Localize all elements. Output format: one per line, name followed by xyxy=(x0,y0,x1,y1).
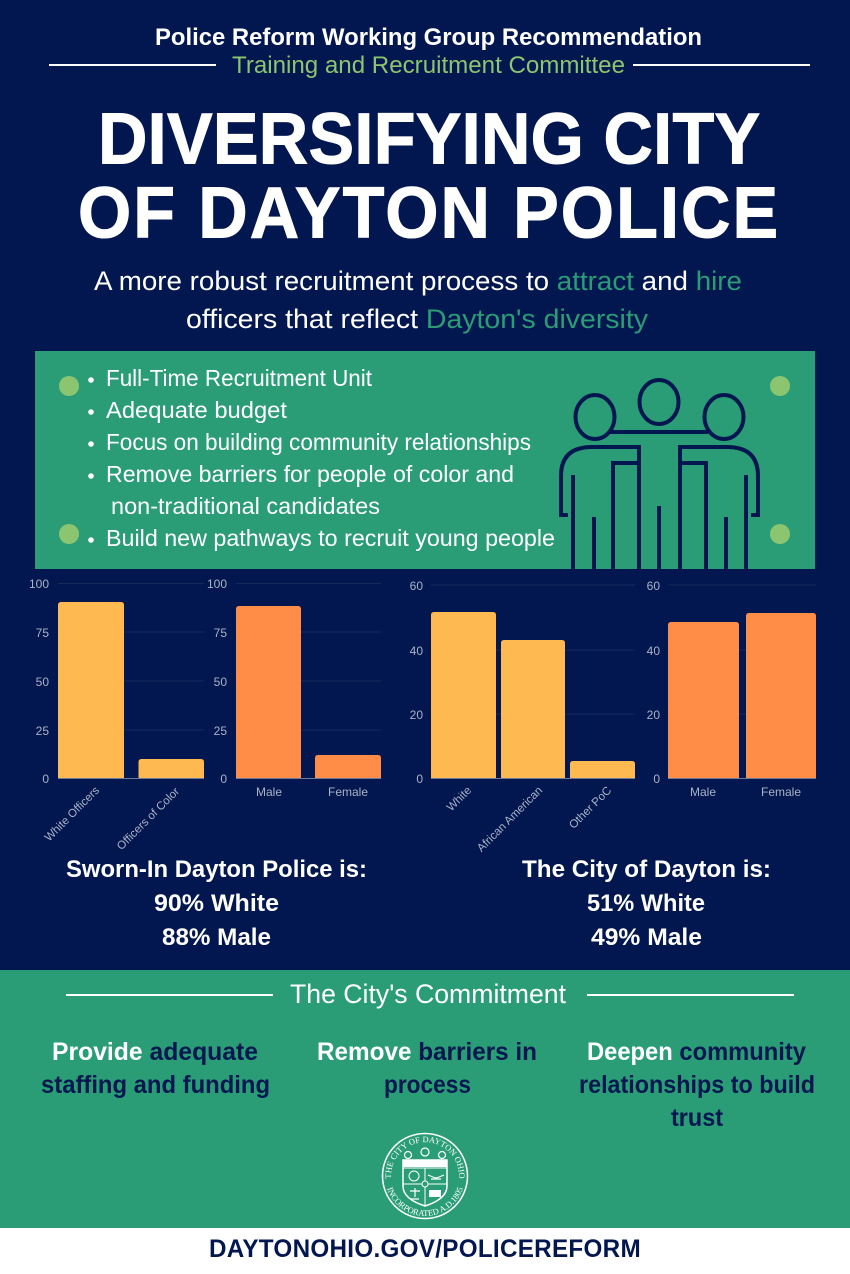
stats: city of Dayton: The City of Dayton is: xyxy=(522,856,771,883)
bar chart: city by race: 20 xyxy=(410,708,423,722)
bullet list: Build new pathways to recruit young people xyxy=(106,525,555,551)
commitment: community: relationships to build xyxy=(579,1071,815,1099)
bar chart: city by race: 40 xyxy=(410,644,423,658)
bar chart: city by gender: 60 xyxy=(647,579,660,593)
stats: city of Dayton: 51% White xyxy=(587,890,705,917)
stats: city of Dayton: 49% Male xyxy=(591,924,702,951)
title: DIVERSIFYING CITY xyxy=(98,98,760,179)
bullet list: Adequate budget xyxy=(106,397,288,423)
bar chart: police by gender: Female xyxy=(328,785,368,799)
commitment: community: trust xyxy=(671,1104,724,1132)
commitment: barriers xyxy=(317,1038,537,1099)
bar chart: police by race: 75 xyxy=(36,626,49,640)
stats: sworn-in police: 88% Male xyxy=(162,924,271,951)
icon: city seal xyxy=(382,1132,468,1220)
bar chart: city by gender: 20 xyxy=(647,708,660,722)
bar chart: city by race: 0 xyxy=(416,772,423,786)
bullet list: non-traditional candidates xyxy=(111,493,380,519)
bar chart: police by gender: 25 xyxy=(214,724,227,738)
subtitle xyxy=(94,266,742,334)
bar chart: city by race: Other PoC xyxy=(567,785,614,832)
commitment: staffing: Provide adequate xyxy=(52,1038,258,1066)
bar chart: city by race: 60 xyxy=(410,579,423,593)
commitment: barriers: Remove barriers in xyxy=(317,1038,537,1066)
stats: sworn-in police xyxy=(66,856,367,951)
stats: sworn-in police: 90% White xyxy=(154,890,279,917)
header: Training and Recruitment Committee xyxy=(232,52,625,79)
footer band xyxy=(0,1228,850,1274)
bullet list xyxy=(88,365,555,551)
bullet list: Full-Time Recruitment Unit xyxy=(106,365,373,391)
commitment heading: The City's Commitment xyxy=(290,979,566,1009)
bar chart: city by race: African American xyxy=(475,785,545,855)
stats: city of Dayton xyxy=(522,856,771,951)
icon: city seal: THE CITY OF DAYTON OHIO xyxy=(385,1136,465,1179)
bar chart: city by gender: 0 xyxy=(653,772,660,786)
bar chart: police by race: 100 xyxy=(29,577,49,591)
bar chart: city by gender: Female xyxy=(761,785,801,799)
title xyxy=(78,98,778,253)
bar chart: city by gender xyxy=(647,579,816,799)
bar chart: police by gender: 50 xyxy=(214,675,227,689)
bar chart: police by race xyxy=(29,577,204,853)
header xyxy=(49,24,810,79)
bar chart: police by gender xyxy=(207,577,381,799)
bar chart: police by race: Officers of Color xyxy=(115,786,182,853)
bar chart: police by gender: 75 xyxy=(214,626,227,640)
footer band: DAYTONOHIO.GOV/POLICEREFORM xyxy=(209,1236,641,1263)
subtitle: officers that reflect Dayton's diversity xyxy=(186,304,649,334)
subtitle: A more robust recruitment process to attract and hire xyxy=(94,266,742,296)
title: OF DAYTON POLICE xyxy=(78,172,778,253)
header: Police Reform Working Group Recommendation xyxy=(155,24,702,51)
bar chart: police by race: 0 xyxy=(42,772,49,786)
bar chart: city by race: White xyxy=(445,785,474,814)
bar chart: police by race: White Officers xyxy=(43,784,102,844)
icon: city seal: INCORPORATED A.D.1805 xyxy=(387,1186,462,1216)
icon: three people xyxy=(561,380,758,569)
bar chart: city by race xyxy=(410,579,635,855)
stats: sworn-in police: Sworn-In Dayton Police is: xyxy=(66,856,367,883)
bullet list: Focus on building community relationships xyxy=(106,429,531,455)
bar chart: police by race: 50 xyxy=(36,675,49,689)
commitment: staffing: staffing and funding xyxy=(41,1071,270,1099)
bar chart: police by gender: Male xyxy=(256,785,282,799)
bar chart: city by gender: Male xyxy=(690,785,716,799)
commitment: barriers: process xyxy=(384,1071,471,1099)
commitment: staffing xyxy=(41,1038,270,1099)
panel: recruitment process xyxy=(35,351,815,569)
bullet list: Remove barriers for people of color and xyxy=(106,461,514,487)
decorative dots xyxy=(59,376,790,544)
commitment: community xyxy=(579,1038,815,1132)
bar chart: city by gender: 40 xyxy=(647,644,660,658)
bar chart: police by gender: 100 xyxy=(207,577,227,591)
bar chart: police by gender: 0 xyxy=(220,772,227,786)
panel: the city's commitment xyxy=(0,970,850,1228)
commitment: community: Deepen community xyxy=(587,1038,806,1066)
bar chart: police by race: 25 xyxy=(36,724,49,738)
